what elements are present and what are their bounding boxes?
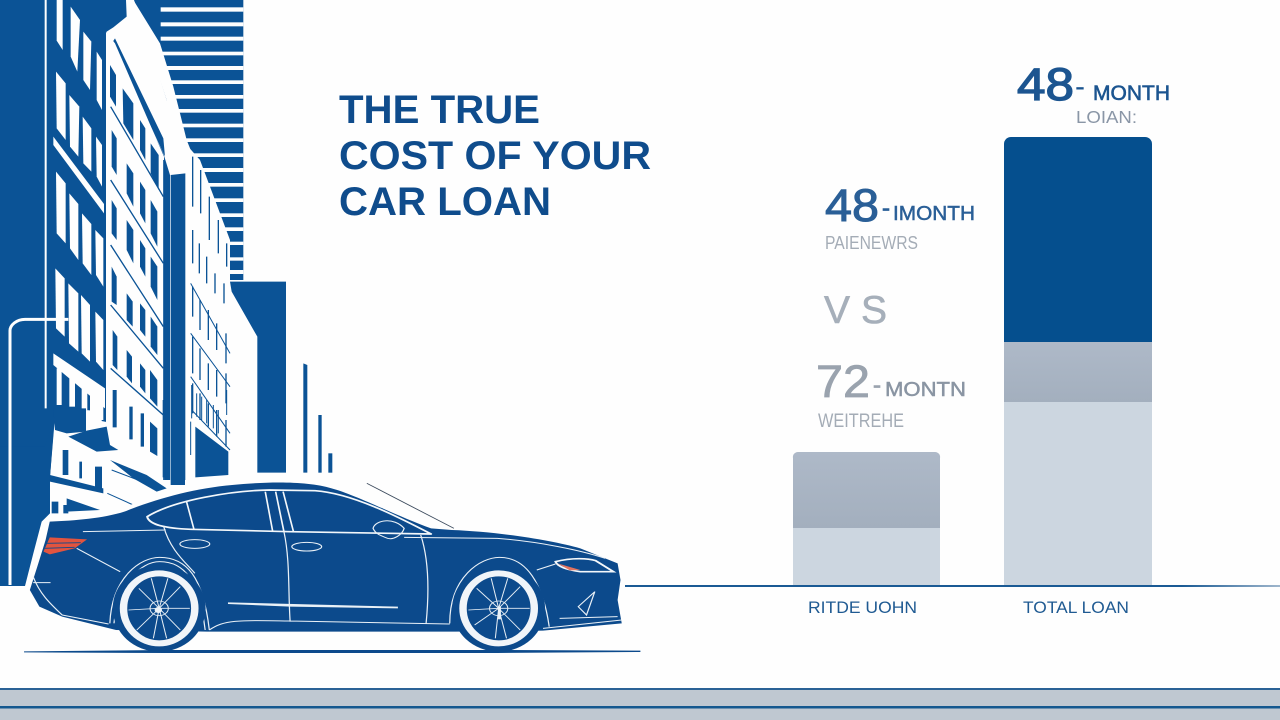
title: COST OF YOUR: [339, 134, 651, 178]
label: 48-month loan: -: [1075, 70, 1085, 103]
bar labels: TOTAL LOAN: [1023, 598, 1129, 617]
white middle wing: [106, 32, 165, 480]
left building facade: [0, 0, 230, 480]
windows of the dark wing: [53, 0, 105, 420]
short bar: [793, 452, 940, 585]
background block and posts: [230, 282, 332, 473]
title: CAR LOAN: [339, 180, 551, 224]
bar labels: [808, 598, 1129, 617]
car body: [30, 482, 622, 632]
bottom road stripes: [0, 688, 1280, 720]
far wing: [185, 143, 230, 480]
car ground shadow: [24, 650, 640, 653]
label: 48-month loan: MONTH: [1093, 82, 1170, 105]
street lamp: [10, 319, 68, 480]
label: 48-month payments: 48: [825, 180, 879, 231]
label: 72-month: 72: [816, 356, 870, 407]
label: 48-month payments: PAIENEWRS: [825, 233, 918, 253]
front wheel: [452, 565, 545, 652]
car: [24, 482, 640, 653]
label: 72-month: WEITREHE: [818, 411, 904, 432]
baseline: [625, 585, 1280, 587]
title: THE TRUE: [339, 88, 540, 132]
bar labels: RITDE UOHN: [808, 598, 917, 617]
label: 48-month loan: LOIAN:: [1076, 107, 1137, 127]
tall bar: [1004, 137, 1152, 585]
label: 72-month: -: [873, 372, 881, 399]
label: 48-month payments: IMONTH: [893, 203, 975, 225]
city buildings illustration: [0, 0, 332, 480]
label: 48-month payments: -: [882, 195, 890, 222]
windows: [147, 490, 431, 534]
label: 72-month: MONTN: [885, 379, 966, 401]
body lines: [33, 527, 622, 630]
label: 48-month loan: [1017, 59, 1170, 127]
label: 72-month: [816, 356, 966, 432]
rear wheel: [113, 565, 206, 652]
label: 48-month loan: 48: [1017, 59, 1074, 110]
vs label: VS: [824, 289, 887, 332]
title: [339, 88, 651, 224]
tail light: [44, 537, 87, 554]
striped tower: [133, 0, 243, 280]
door handles and mirror: [180, 521, 595, 615]
bar chart: [625, 137, 1280, 587]
lower street section and storefront: [0, 380, 240, 613]
label: 48-month payments: [825, 180, 975, 253]
headlight: [555, 559, 613, 572]
